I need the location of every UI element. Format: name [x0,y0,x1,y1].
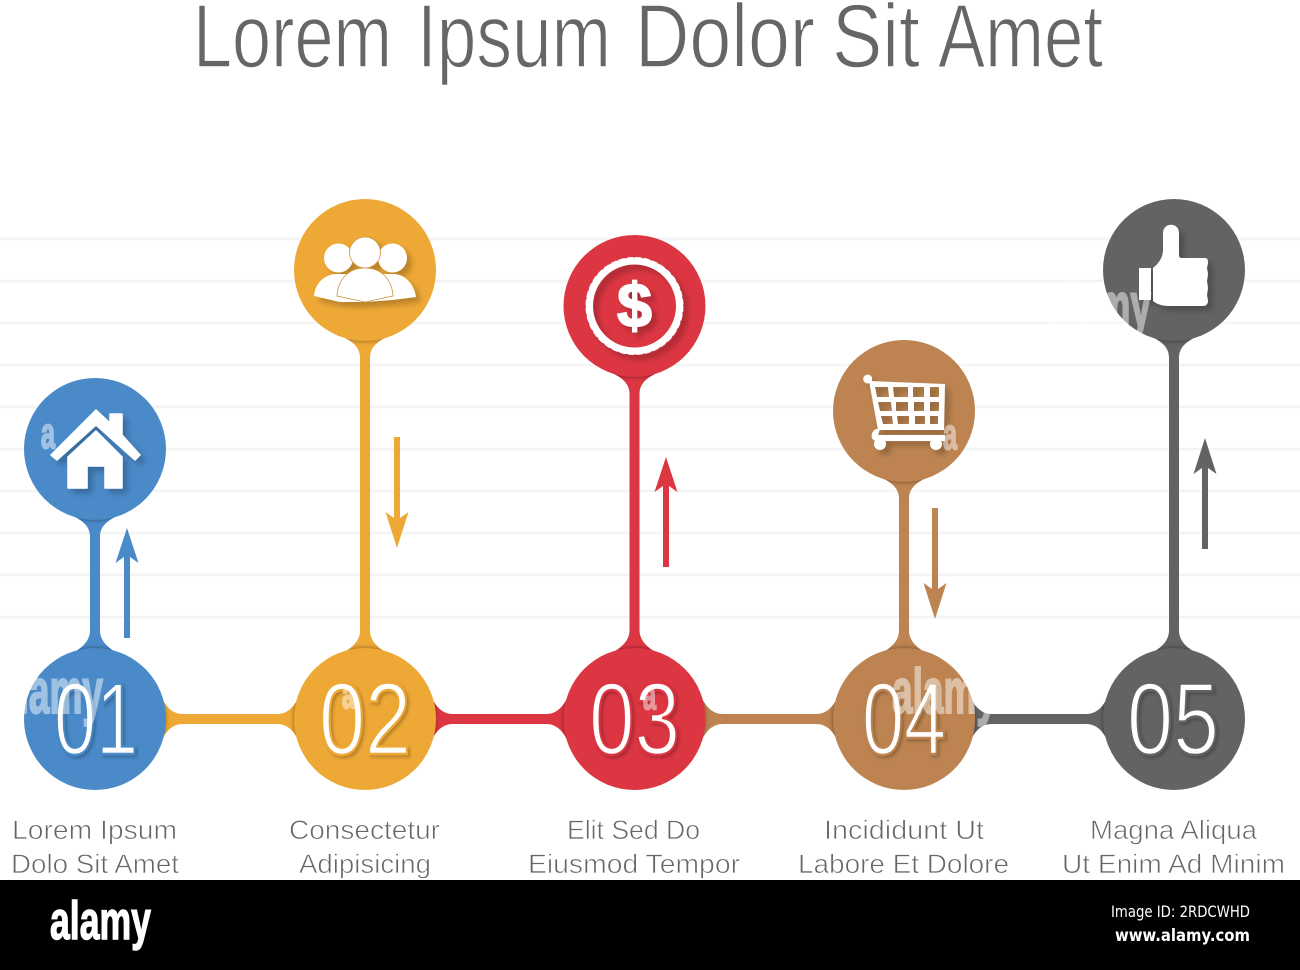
arrow: up red [654,457,678,567]
panel: step 04 [798,340,1009,879]
connector: vertical red [613,374,656,651]
connector: vertical orange [345,338,386,651]
top circle orange [294,199,436,341]
panel: step 05 [1062,199,1285,879]
watermarks: alamy [892,657,997,727]
watermarks: a [643,674,656,718]
label 01: Lorem Ipsum [12,815,177,845]
number circle 01 [24,648,166,790]
label 05 [1062,815,1285,879]
footer bar [0,880,1300,970]
icon: shopping cart [863,374,945,450]
icon: people [314,237,416,302]
connector: horizontal orange [164,701,296,737]
label 05: Ut Enim Ad Minim [1062,849,1285,879]
connector: vertical grey [1154,338,1194,651]
top circle brown [833,340,975,482]
number circle 02 [294,648,436,790]
image id: Image ID: 2RDCWHD [1111,902,1250,921]
connector: horizontal red [434,700,566,738]
watermarks: a [41,409,55,458]
label 03 [528,815,740,879]
number 03: 03 [589,662,680,776]
label 05: Magna Aliqua [1090,815,1258,845]
website: www.alamy.com [1115,926,1250,946]
watermarks: alamy [0,657,103,727]
label 03: Eiusmod Tempor [528,849,740,879]
watermarks: alamy [1046,271,1151,341]
watermarks [0,271,1151,727]
connector: horizontal brown [702,700,836,738]
label 03: Elit Sed Do [567,815,700,845]
label 04: Incididunt Ut [824,815,985,845]
number 04: 04 [862,662,946,776]
arrow: down brown [924,508,946,619]
number 01: 01 [54,662,138,776]
number 02: 02 [319,662,411,776]
panel: step 03 [528,235,740,879]
label 01 [11,815,180,879]
connectors between circles [24,245,1245,769]
connector: vertical brown [884,479,924,650]
footer logo: alamy [50,891,151,951]
top circle red [564,235,706,377]
connector: vertical blue [75,517,115,651]
arrow: down orange [386,437,408,548]
label 04 [798,815,1009,879]
panel: step 01 [11,378,180,879]
icon: thumbs up [1139,225,1208,306]
number circle 05 [1103,648,1245,790]
watermarks: a [342,673,355,717]
label 01: Dolo Sit Amet [11,849,180,879]
icon: house [51,410,140,488]
arrow: up grey [1194,438,1216,549]
number 05: 05 [1127,662,1219,776]
label 02: Adipisicing [299,849,431,879]
connector: horizontal grey [972,701,1106,737]
icon: dollar coin [586,258,682,354]
watermarks: a [943,410,957,459]
label 02: Consectetur [289,815,440,845]
label 04: Labore Et Dolore [798,849,1009,879]
panel: step 02 [289,199,440,879]
number circle 03 [564,648,706,790]
top circle blue [24,378,166,520]
number circle 04 [833,648,975,790]
icon: dollar coin: $ [617,272,652,341]
top circle grey [1103,199,1245,341]
title [193,0,1103,87]
arrow: up blue [116,528,138,638]
label 02 [289,815,440,879]
